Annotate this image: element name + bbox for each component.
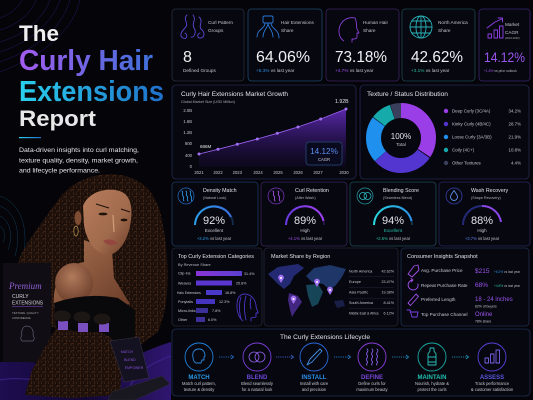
donut chart — [374, 110, 428, 166]
panel: market growth line chart: 2.0B — [183, 108, 192, 113]
metric card: wash recovery: 88% — [471, 215, 493, 227]
box: EXTENSIONS — [12, 300, 44, 306]
metric card: curl retention: High — [300, 228, 310, 233]
arrow — [392, 355, 408, 359]
KPI card: curl pattern groups: Defined Groups — [183, 68, 216, 73]
panel: consumer insights: 62% of buyers — [475, 304, 497, 308]
metric card: curl retention: 89% — [294, 215, 316, 227]
region list: 23.47% — [381, 280, 395, 284]
title: Extensions — [19, 76, 164, 108]
hang tag: MATCH — [121, 350, 134, 354]
panel: texture distribution donut: Texture / Status Distribution — [367, 91, 449, 98]
satin — [0, 342, 171, 400]
step: blend: BLEND — [247, 375, 268, 381]
intro text: texture quality, density, market growth, — [19, 158, 138, 164]
KPI card: hair extensions share: Share — [281, 28, 294, 33]
KPI card: hair extensions share: Hair Extensions — [281, 20, 314, 25]
panel: consumer insights: +6.2% vs last year — [494, 270, 521, 274]
KPI card: market CAGR: Market — [505, 22, 520, 27]
panel: top categories bar chart: Halo Extensions — [177, 291, 201, 295]
panel: consumer insights — [401, 248, 529, 326]
intro text: Data-driven insights into curl matching, — [19, 147, 139, 154]
panel: top categories bar chart: 16.8% — [225, 291, 236, 295]
KPI card: human hair share: +4.7% vs last year — [335, 68, 374, 73]
metric card: density match: +3.2% vs last year — [197, 236, 232, 241]
panel: top categories bar chart: 31.4% — [244, 272, 255, 276]
metric card: density match: (Natural Look) — [203, 196, 226, 200]
box: Premium — [8, 281, 42, 291]
panel: market growth line chart: Curly Hair Extensions Market Growth — [181, 91, 288, 98]
metric card: wash recovery: (Shape Recovery) — [471, 196, 501, 200]
panel: top categories bar chart: Top Curly Extension Categories — [178, 254, 254, 260]
panel: consumer insights: 68% — [475, 282, 488, 289]
icon: curls — [181, 15, 204, 38]
metric card: blending score: Excellent — [384, 228, 403, 233]
step: define: Define curls for — [358, 381, 386, 386]
panel: market growth line chart: 800 — [185, 141, 193, 146]
panel: texture distribution donut — [360, 85, 529, 179]
neck and shoulder — [54, 240, 130, 308]
KPI card: north america share: North America — [438, 20, 468, 25]
legend: 28.7% — [509, 122, 521, 127]
step: match: MATCH — [188, 375, 210, 381]
arrow — [452, 355, 468, 359]
step: define — [356, 343, 389, 392]
title — [19, 21, 164, 131]
KPI card: hair extensions share: 64.06% — [256, 49, 310, 66]
metric card: wash recovery: +3.7% vs last year — [465, 236, 500, 241]
arrow — [334, 355, 350, 359]
panel: consumer insights: Avg. Purchase Price — [421, 268, 463, 273]
metric card: blending score — [350, 182, 436, 246]
panel: consumer insights: +4.8% vs last year — [494, 284, 521, 288]
black top — [54, 296, 135, 352]
legend: 34.2% — [509, 109, 521, 114]
step: assess: ASSESS — [480, 375, 504, 381]
panel: top categories bar chart: 6.0% — [208, 318, 217, 322]
box: CURLY — [12, 294, 29, 300]
panel: top categories bar chart: By Revenue Share — [178, 262, 211, 267]
step: assess: & customer satisfaction — [471, 387, 514, 392]
icon: head profile — [339, 18, 359, 42]
step: install: and precision — [302, 387, 327, 392]
panel: top categories bar chart: 12.3% — [219, 300, 230, 304]
region list: Middle East & Africa — [349, 312, 379, 316]
icon: hair clip — [257, 16, 279, 38]
KPI card: human hair share — [326, 9, 399, 81]
panel: market share by region — [264, 248, 398, 326]
KPI card: market CAGR: CAGR — [505, 30, 519, 35]
legend: Coily (4C+) — [452, 148, 475, 153]
metric card: curl retention: Curl Retention — [295, 188, 329, 194]
KPI card: human hair share: Share — [363, 28, 376, 33]
step: blend: for a natural look — [242, 387, 273, 392]
panel: market growth line chart — [172, 85, 356, 179]
legend: Loose Curly (3A/3B) — [452, 135, 492, 140]
panel: top categories bar chart: 7.8% — [212, 309, 221, 313]
title: Report — [19, 106, 97, 131]
panel: top categories bar chart: Micro-links — [178, 309, 196, 313]
panel: market growth line chart: 2022 — [213, 170, 223, 175]
region list — [349, 270, 395, 316]
panel: market growth line chart: 0 — [190, 164, 193, 169]
panel: consumer insights: 78% share — [475, 320, 491, 324]
KPI card: human hair share: Human Hair — [363, 20, 388, 25]
panel: market growth line chart: Global Market Size (USD Million) — [181, 100, 235, 104]
panel: top categories bar chart: Clip-Ins — [178, 272, 191, 276]
intro text: and lifecycle performance. — [19, 168, 100, 174]
panel: texture distribution donut: 100% — [391, 132, 411, 141]
step: maintain: Nourish, hydrate & — [415, 381, 449, 386]
box — [0, 263, 51, 362]
region list: 8.41% — [384, 301, 395, 305]
icon: globe — [410, 16, 432, 38]
step: maintain: protect the curls — [417, 387, 447, 392]
region list: 6.12% — [384, 312, 395, 316]
panel: top categories bar chart — [172, 248, 262, 326]
metric card: density match: 92% — [203, 215, 225, 227]
metric card: wash recovery: High — [477, 228, 487, 233]
box: TEXTURE. QUALITY. — [12, 311, 39, 315]
KPI card: north america share: +3.1% vs last year — [411, 68, 450, 73]
metric card: wash recovery: Wash Recovery — [471, 188, 509, 194]
step: define: DEFINE — [361, 375, 383, 381]
legend: Kinky Curly (4B/4C) — [452, 122, 491, 127]
panel: market growth line chart: 1.6B — [183, 119, 192, 124]
metric card: blending score: Blending Score — [383, 188, 419, 194]
panel: top categories bar chart: Other — [178, 318, 188, 322]
panel: market growth line chart: 2027 — [313, 170, 323, 175]
icon: repeat arrow — [408, 278, 418, 290]
step: install: Install with care — [300, 381, 329, 386]
step: match: Match curl pattern, — [182, 381, 216, 386]
title: Curly Hair — [19, 45, 153, 77]
panel: market growth line chart: 2030 — [339, 170, 349, 175]
icon: braided head — [237, 294, 258, 321]
step: install — [300, 343, 329, 392]
region list: Asia Pacific — [349, 290, 368, 294]
step: blend: Blend seamlessly — [241, 381, 274, 386]
metric card: blending score: (Seamless Blend) — [383, 196, 412, 200]
KPI card: hair extensions share — [248, 9, 322, 81]
metric card: density match — [172, 182, 258, 246]
map pins — [278, 275, 333, 304]
panel: texture distribution donut: Total — [396, 142, 406, 147]
box: CONFIDENCE. — [12, 316, 31, 320]
hang tag: BLEND — [124, 358, 136, 362]
region list: South America — [349, 301, 374, 305]
metric card: blending score: 94% — [382, 215, 404, 227]
KPI card: curl pattern groups: 8 — [183, 49, 192, 66]
panel: top categories bar chart: Ponytails — [178, 300, 193, 304]
legend: 4.4% — [511, 161, 521, 166]
panel: market growth line chart: 2024 — [253, 170, 263, 175]
step: define: maximum beauty — [356, 387, 389, 392]
metric card: blending score: +2.6% vs last year — [376, 236, 411, 241]
step: match — [182, 343, 216, 392]
metric card: curl retention: +4.1% vs last year — [288, 236, 323, 241]
panel: consumer insights: Consumer Insights Snapshot — [407, 254, 478, 260]
panel: consumer insights: Top Purchase Channel — [421, 312, 467, 317]
KPI card: market CAGR — [479, 9, 530, 81]
region list: Europe — [349, 280, 361, 284]
earring — [74, 226, 78, 236]
icon: growth bars — [487, 18, 503, 38]
icon: ruler — [408, 294, 418, 306]
KPI card: north america share: Share — [438, 28, 451, 33]
panel: market growth line chart: 686M — [200, 144, 212, 149]
hang tag — [110, 337, 149, 382]
panel: lifecycle: The Curly Extensions Lifecycle — [280, 334, 371, 341]
step: maintain: MAINTAIN — [418, 375, 446, 381]
panel: top categories bar chart: 25.6% — [236, 282, 247, 286]
step: assess: Track performance — [475, 381, 510, 386]
step: assess — [471, 343, 514, 392]
photo: model with curly hair and product — [0, 174, 171, 400]
KPI card: market CAGR: 14.12% — [484, 50, 525, 65]
KPI card: market CAGR: +1.8% vs prior outlook — [484, 69, 517, 73]
KPI card: curl pattern groups — [172, 9, 244, 81]
KPI card: curl pattern groups: Curl Pattern — [208, 20, 233, 25]
KPI card: human hair share: 73.18% — [335, 49, 387, 66]
intro text — [19, 147, 139, 174]
panel: market growth line chart: 1.2B — [183, 130, 192, 135]
metric card: curl retention — [261, 182, 347, 246]
step: blend — [241, 343, 274, 392]
step: match: texture & density — [184, 387, 215, 392]
panel: consumer insights: Preferred Length — [421, 297, 456, 302]
legend: Deep Curly (3C/4A) — [452, 109, 491, 114]
callout: CAGR: CAGR — [318, 157, 330, 162]
callout: CAGR: 14.12% — [310, 147, 338, 156]
panel: market growth line chart: 1.92B — [335, 99, 349, 105]
panel: market growth line chart: 400 — [185, 153, 193, 158]
world map — [268, 264, 346, 317]
legend: Other Textures — [452, 161, 482, 166]
legend — [444, 109, 521, 166]
panel: top categories bar chart: Weaves — [178, 282, 191, 286]
hair bundles — [25, 310, 122, 398]
KPI card: hair extensions share: +5.3% vs last year — [256, 68, 295, 73]
KPI card: curl pattern groups: Groups — [208, 28, 224, 33]
metric card: density match: Density Match — [203, 188, 237, 194]
KPI card: market CAGR: (2024-2030) — [505, 36, 520, 40]
hair — [14, 174, 168, 345]
region list: North America — [349, 270, 373, 274]
arrow — [219, 355, 234, 359]
arrow — [276, 355, 294, 359]
title: The — [19, 21, 59, 46]
face — [83, 190, 131, 255]
step: maintain — [415, 343, 449, 392]
metric card: curl retention: (After Wash) — [295, 196, 316, 200]
metric card: density match: Excellent — [205, 228, 224, 233]
panel: consumer insights: Repeat Purchase Rate — [421, 283, 468, 288]
panel: consumer insights: Online — [475, 312, 493, 318]
panel: market growth line chart: 2021 — [194, 170, 204, 175]
region list: 19.38% — [381, 290, 395, 294]
KPI card: north america share: 42.62% — [411, 49, 463, 66]
icon: shopping cart — [407, 310, 418, 317]
icon: price tag — [408, 265, 419, 277]
KPI card: north america share — [402, 9, 475, 81]
panel: consumer insights: 18 - 24 inches — [475, 297, 513, 303]
comb — [108, 376, 170, 400]
panel: lifecycle — [172, 329, 530, 396]
legend: 21.9% — [509, 135, 521, 140]
panel: market growth line chart: 2025 — [273, 170, 283, 175]
panel: market growth line chart: 2026 — [293, 170, 303, 175]
metric card: wash recovery — [439, 182, 530, 246]
region list: 42.62% — [381, 270, 395, 274]
panel: market growth line chart: 2023 — [233, 170, 243, 175]
legend: 10.8% — [509, 148, 521, 153]
hang tag: EMPOWER — [125, 366, 144, 370]
callout: CAGR — [306, 142, 342, 165]
step: install: INSTALL — [302, 375, 327, 381]
panel: consumer insights: $215 — [475, 268, 490, 275]
panel: market share by region: Market Share by Region — [271, 254, 330, 260]
